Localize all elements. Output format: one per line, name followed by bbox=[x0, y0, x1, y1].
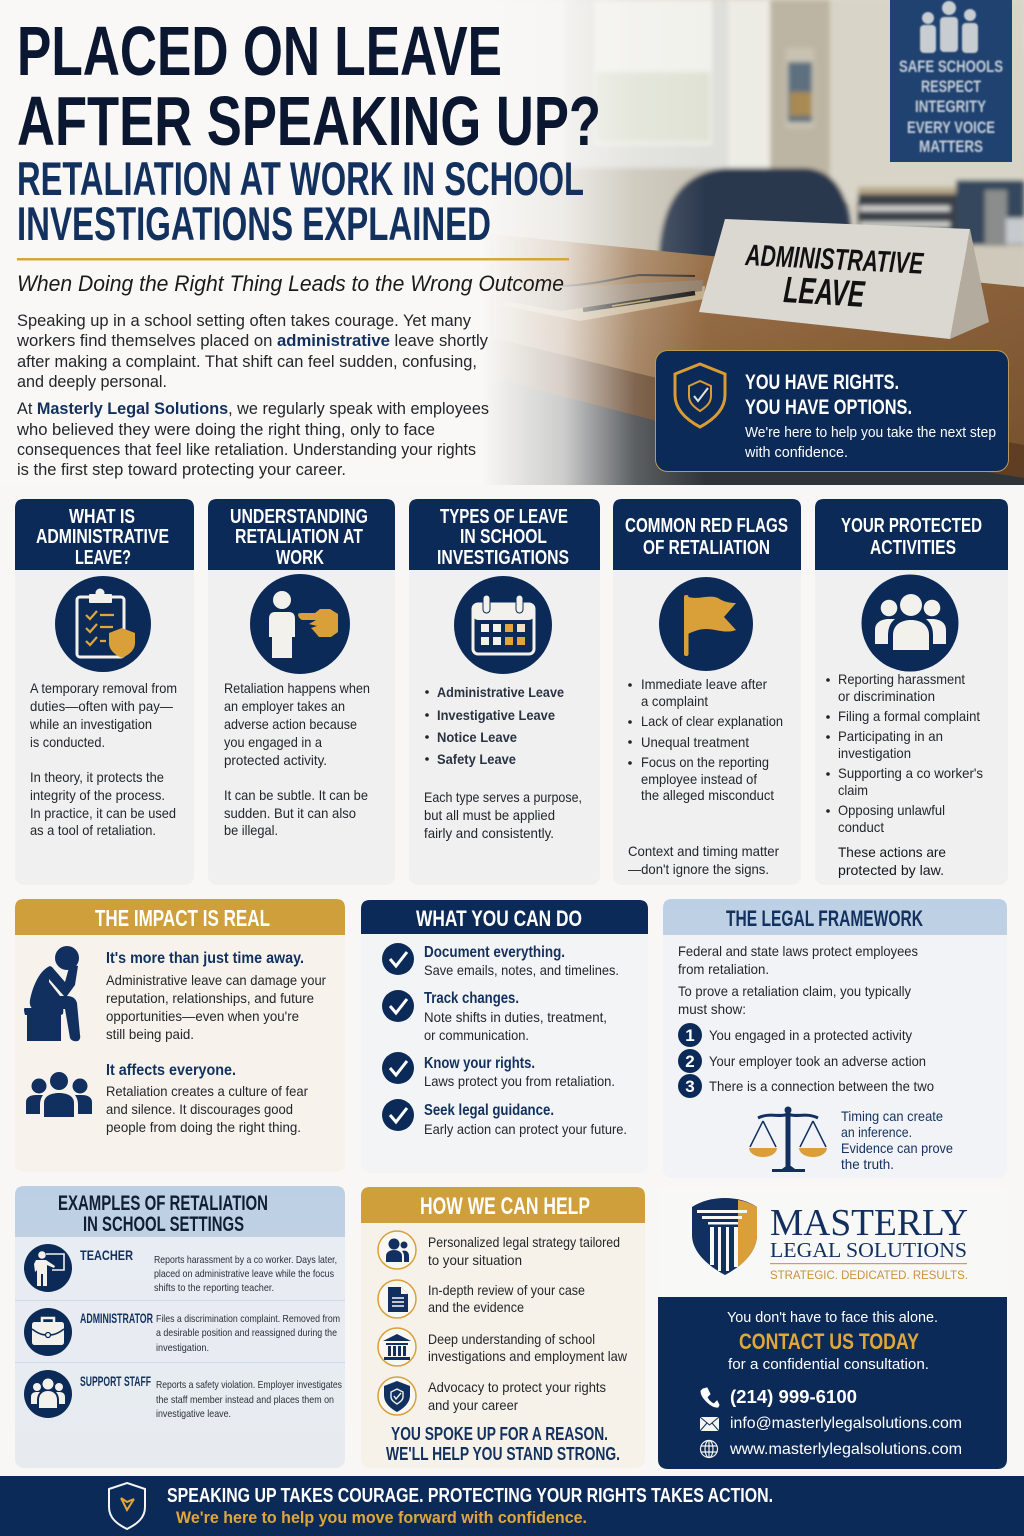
text: from retaliation. bbox=[678, 961, 769, 977]
icon: calendar bbox=[454, 576, 552, 674]
intro text: and deeply personal. bbox=[17, 372, 167, 391]
poster: safe schools: EVERY VOICE bbox=[907, 118, 995, 137]
numbered list: 3 bbox=[685, 1077, 695, 1096]
subtitle bbox=[17, 152, 584, 250]
item: document everything: Document everything. bbox=[424, 944, 565, 961]
item: school and employment law bbox=[378, 1328, 628, 1366]
hero photo: desk with administrative leave sign bbox=[470, 0, 1024, 485]
item: advocacy bbox=[378, 1377, 606, 1415]
text: people from doing the right thing. bbox=[106, 1119, 301, 1135]
text: It affects everyone. bbox=[106, 1062, 236, 1079]
heading: INVESTIGATIONS bbox=[437, 547, 569, 569]
heading: YOUR PROTECTED bbox=[841, 515, 982, 537]
example: support staff: SUPPORT STAFF bbox=[80, 1373, 151, 1389]
text: Each type serves a purpose, bbox=[424, 789, 582, 805]
intro text: is the first step toward protecting your career. bbox=[17, 460, 346, 479]
panel: contact us bbox=[658, 1297, 1007, 1469]
item: track changes: or communication. bbox=[424, 1027, 529, 1043]
heading bbox=[58, 1192, 268, 1236]
example: teacher: placed on administrative leave while the focus bbox=[154, 1268, 334, 1280]
item: track changes: Track changes. bbox=[424, 990, 519, 1007]
list: claim bbox=[838, 782, 868, 798]
panel: contact us: CONTACT US TODAY bbox=[739, 1329, 919, 1354]
item: track changes: Note shifts in duties, treatment, bbox=[424, 1009, 607, 1025]
logo: masterly legal solutions: MASTERLY bbox=[770, 1202, 968, 1244]
example: administrator: Files a discrimination complaint. Removed from bbox=[156, 1313, 340, 1325]
title bbox=[17, 12, 601, 160]
text bbox=[424, 789, 582, 841]
panel: the legal framework bbox=[663, 899, 1007, 1178]
text: Retaliation creates a culture of fear bbox=[106, 1083, 308, 1099]
heading: HOW WE CAN HELP bbox=[420, 1193, 590, 1220]
list: Administrative Leave bbox=[437, 684, 564, 700]
footer banner bbox=[0, 1476, 1024, 1536]
item: seek legal guidance bbox=[382, 1099, 627, 1137]
footer banner: SPEAKING UP TAKES COURAGE. PROTECTING YOUR RIGHTS TAKES ACTION. bbox=[167, 1485, 773, 1507]
callout: you have rights: YOU HAVE RIGHTS. bbox=[745, 371, 899, 394]
list bbox=[628, 676, 783, 803]
text: but all must be applied bbox=[424, 807, 555, 823]
heading: COMMON RED FLAGS bbox=[625, 515, 788, 537]
text bbox=[106, 950, 326, 1042]
panel: how we can help bbox=[361, 1187, 645, 1468]
panel: contact us: info@masterlylegalsolutions.com bbox=[730, 1415, 962, 1432]
panel: types of leave bbox=[409, 499, 600, 885]
title: PLACED ON LEAVE bbox=[17, 12, 502, 90]
text: These actions are bbox=[838, 844, 946, 860]
item: school and employment law: Deep understanding of school bbox=[428, 1331, 595, 1347]
footer banner: We're here to help you move forward with confidence. bbox=[176, 1508, 587, 1527]
closing statement bbox=[386, 1424, 620, 1464]
icon: envelope bbox=[700, 1417, 719, 1431]
text: Administrative leave can damage your bbox=[106, 972, 326, 988]
text: is conducted. bbox=[30, 734, 105, 750]
example: administrator bbox=[24, 1308, 340, 1356]
text: sudden. But it can also bbox=[224, 805, 356, 821]
icon: person and pointing hand bbox=[250, 574, 350, 674]
heading: LEAVE? bbox=[75, 547, 131, 569]
list: Safety Leave bbox=[437, 751, 516, 767]
heading bbox=[437, 506, 569, 569]
hero fade overlay bbox=[0, 0, 1024, 485]
subtitle: INVESTIGATIONS EXPLAINED bbox=[17, 197, 491, 250]
icon: footer shield bbox=[109, 1483, 145, 1529]
item: track changes bbox=[382, 990, 607, 1043]
heading: IN SCHOOL SETTINGS bbox=[83, 1213, 244, 1236]
text: be illegal. bbox=[224, 822, 278, 838]
text bbox=[106, 1062, 308, 1135]
list: a complaint bbox=[641, 693, 708, 709]
text: A temporary removal from bbox=[30, 680, 177, 696]
text bbox=[678, 943, 918, 1017]
list: Investigative Leave bbox=[437, 707, 555, 723]
heading: THE LEGAL FRAMEWORK bbox=[726, 906, 923, 931]
numbered list: You engaged in a protected activity bbox=[709, 1027, 912, 1043]
icon: distressed person bbox=[24, 946, 80, 1041]
heading: WHAT IS bbox=[69, 506, 135, 528]
text: reputation, relationships, and future bbox=[106, 990, 314, 1006]
example: support staff: the staff member instead and places them on bbox=[156, 1394, 334, 1406]
heading: ADMINISTRATIVE bbox=[36, 526, 169, 548]
text: Timing can create bbox=[841, 1108, 943, 1124]
example: support staff: Reports a safety violation. Employer investigates bbox=[156, 1379, 342, 1391]
heading: UNDERSTANDING bbox=[230, 506, 368, 528]
icon: scales of justice bbox=[749, 1106, 827, 1172]
subtitle: RETALIATION AT WORK IN SCHOOL bbox=[17, 152, 584, 205]
list: Participating in an bbox=[838, 728, 943, 744]
callout: you have rights bbox=[656, 350, 1008, 472]
text: opportunities—even when you're bbox=[106, 1008, 299, 1024]
list: Reporting harassment bbox=[838, 671, 965, 687]
list: Unequal treatment bbox=[641, 734, 749, 750]
text: the truth. bbox=[841, 1156, 894, 1172]
text: Context and timing matter bbox=[628, 843, 779, 859]
list: Supporting a co worker's bbox=[838, 765, 983, 781]
intro text: At Masterly Legal Solutions, we regularly speak with employees bbox=[17, 399, 489, 418]
closing statement: WE'LL HELP YOU STAND STRONG. bbox=[386, 1444, 620, 1464]
item: school and employment law: investigations and employment law bbox=[428, 1348, 628, 1364]
list: investigation bbox=[838, 745, 911, 761]
tagline: When Doing the Right Thing Leads to the Wrong Outcome bbox=[17, 271, 564, 296]
list: conduct bbox=[838, 819, 884, 835]
panel: contact us: for a confidential consultation. bbox=[728, 1356, 929, 1373]
text: fairly and consistently. bbox=[424, 825, 554, 841]
numbered list: 2 bbox=[685, 1052, 695, 1071]
list: or discrimination bbox=[838, 688, 935, 704]
intro text: consequences that feel like retaliation. Understanding your rights bbox=[17, 440, 476, 459]
poster: safe schools bbox=[890, 0, 1012, 162]
intro text: who believed they were doing the right thing, only to face bbox=[16, 420, 435, 439]
panel: understanding retaliation bbox=[208, 499, 395, 885]
example: teacher: Reports harassment by a co worker. Days later, bbox=[154, 1254, 337, 1266]
text bbox=[841, 1108, 953, 1172]
intro text bbox=[16, 311, 489, 479]
callout: you have rights: We're here to help you take the next step bbox=[745, 424, 996, 441]
list bbox=[425, 684, 564, 767]
numbered list: 1 bbox=[685, 1026, 695, 1045]
item: know your rights: Know your rights. bbox=[424, 1055, 535, 1072]
item: know your rights bbox=[382, 1052, 615, 1089]
logo: masterly legal solutions: STRATEGIC. DEDICATED. RESULTS. bbox=[770, 1268, 968, 1282]
panel: protected activities bbox=[815, 499, 1008, 885]
icon: flag bbox=[659, 577, 753, 671]
text: as a tool of retaliation. bbox=[30, 822, 156, 838]
list: the alleged misconduct bbox=[641, 787, 774, 803]
heading: WORK bbox=[276, 547, 324, 569]
text: and silence. It discourages good bbox=[106, 1101, 293, 1117]
heading: IN SCHOOL bbox=[460, 526, 547, 548]
text: Evidence can prove bbox=[841, 1140, 953, 1156]
intro text: after making a complaint. That shift can feel sudden, confusing, bbox=[17, 352, 477, 371]
poster: safe schools: RESPECT bbox=[921, 77, 981, 96]
logo: masterly legal solutions: LEGAL SOLUTIONS bbox=[770, 1238, 967, 1262]
list: Filing a formal complaint bbox=[838, 708, 980, 724]
text bbox=[224, 680, 370, 838]
panel: contact us: www.masterlylegalsolutions.com bbox=[729, 1441, 962, 1458]
heading: TYPES OF LEAVE bbox=[440, 506, 568, 528]
list: Focus on the reporting bbox=[641, 754, 769, 770]
text: adverse action because bbox=[224, 716, 357, 732]
icon: people bbox=[862, 574, 958, 672]
panel: what you can do bbox=[361, 900, 648, 1173]
text: protected activity. bbox=[224, 752, 327, 768]
icon: column shield bbox=[692, 1198, 757, 1275]
item: case review: In-depth review of your case bbox=[428, 1282, 585, 1298]
example: administrator: ADMINISTRATOR bbox=[80, 1310, 153, 1326]
text: you engaged in a bbox=[224, 734, 322, 750]
panel: what is administrative leave bbox=[15, 499, 194, 885]
example: support staff bbox=[24, 1370, 342, 1420]
text bbox=[628, 843, 779, 877]
item: case review: and the evidence bbox=[428, 1299, 524, 1315]
intro text: Speaking up in a school setting often takes courage. Yet many bbox=[17, 311, 471, 330]
heading: OF RETALIATION bbox=[643, 537, 770, 559]
heading: EXAMPLES OF RETALIATION bbox=[58, 1192, 268, 1215]
list bbox=[826, 671, 983, 835]
item: know your rights: Laws protect you from retaliation. bbox=[424, 1073, 615, 1089]
list: Lack of clear explanation bbox=[641, 713, 783, 729]
example: teacher: TEACHER bbox=[80, 1247, 133, 1263]
poster: safe schools: INTEGRITY bbox=[915, 97, 987, 116]
text: still being paid. bbox=[106, 1026, 194, 1042]
heading bbox=[230, 506, 368, 569]
text: must show: bbox=[678, 1001, 746, 1017]
text: integrity of the process. bbox=[30, 787, 165, 803]
item: seek legal guidance: Seek legal guidance. bbox=[424, 1102, 554, 1119]
callout: you have rights: YOU HAVE OPTIONS. bbox=[745, 396, 912, 419]
text bbox=[29, 680, 177, 838]
poster: safe schools: MATTERS bbox=[919, 137, 983, 156]
sign: administrative leave: ADMINISTRATIVE bbox=[744, 239, 925, 281]
example: administrator: investigation. bbox=[156, 1342, 209, 1354]
list: Opposing unlawful bbox=[838, 802, 945, 818]
example: teacher bbox=[24, 1244, 337, 1294]
example: administrator: a desirable position and reassigned during the bbox=[156, 1327, 337, 1339]
panel: contact us: (214) 999-6100 bbox=[730, 1387, 857, 1407]
item: legal strategy bbox=[378, 1231, 620, 1269]
item: advocacy: and your career bbox=[428, 1397, 518, 1413]
text: In practice, it can be used bbox=[30, 805, 176, 821]
text: In theory, it protects the bbox=[30, 769, 164, 785]
text: —don't ignore the signs. bbox=[628, 861, 769, 877]
text: It's more than just time away. bbox=[106, 950, 304, 967]
icon: phone bbox=[701, 1388, 719, 1407]
panel: the impact is real bbox=[15, 899, 345, 1172]
icon: shield check bbox=[675, 364, 725, 427]
item: legal strategy: Personalized legal strategy tailored bbox=[428, 1234, 620, 1250]
item: advocacy: Advocacy to protect your rights bbox=[428, 1379, 606, 1395]
text: Retaliation happens when bbox=[224, 680, 370, 696]
list: Immediate leave after bbox=[641, 676, 767, 692]
text bbox=[838, 844, 946, 878]
list: Notice Leave bbox=[437, 729, 517, 745]
item: legal strategy: to your situation bbox=[428, 1252, 522, 1268]
title: AFTER SPEAKING UP? bbox=[17, 82, 601, 160]
numbered list: Your employer took an adverse action bbox=[709, 1053, 926, 1069]
numbered list: There is a connection between the two bbox=[709, 1078, 934, 1094]
heading: ACTIVITIES bbox=[870, 537, 956, 559]
icon: group bbox=[26, 1072, 92, 1117]
example: teacher: shifts to the reporting teacher. bbox=[154, 1282, 274, 1294]
text: duties—often with pay— bbox=[30, 698, 173, 714]
text: protected by law. bbox=[838, 862, 944, 878]
sign: administrative leave: LEAVE bbox=[782, 269, 867, 315]
list: employee instead of bbox=[641, 771, 757, 787]
item: document everything bbox=[382, 943, 619, 978]
item: case review bbox=[378, 1280, 585, 1318]
heading bbox=[625, 515, 788, 559]
text: To prove a retaliation claim, you typically bbox=[678, 983, 911, 999]
sign: administrative leave bbox=[699, 219, 989, 339]
logo: masterly legal solutions bbox=[658, 1187, 1007, 1299]
panel: contact us: You don't have to face this alone. bbox=[727, 1309, 938, 1326]
example: support staff: investigative leave. bbox=[156, 1408, 231, 1420]
heading bbox=[841, 515, 982, 559]
text: an employer takes an bbox=[224, 698, 345, 714]
icon: globe bbox=[700, 1440, 718, 1458]
panel: red flags bbox=[613, 499, 801, 885]
text: while an investigation bbox=[29, 716, 152, 732]
callout: you have rights: with confidence. bbox=[744, 444, 848, 461]
item: seek legal guidance: Early action can protect your future. bbox=[424, 1121, 627, 1137]
numbered list bbox=[678, 1023, 934, 1098]
heading: WHAT YOU CAN DO bbox=[416, 906, 582, 931]
text: an inference. bbox=[841, 1124, 912, 1140]
panel: examples of retaliation bbox=[15, 1186, 345, 1468]
closing statement: YOU SPOKE UP FOR A REASON. bbox=[391, 1424, 608, 1444]
heading: RETALIATION AT bbox=[235, 526, 363, 548]
text: Federal and state laws protect employees bbox=[678, 943, 918, 959]
item: document everything: Save emails, notes, and timelines. bbox=[424, 962, 619, 978]
text: It can be subtle. It can be bbox=[224, 787, 368, 803]
intro text: workers find themselves placed on administrative leave shortly bbox=[16, 331, 488, 350]
icon: clipboard and shield bbox=[55, 576, 151, 672]
heading bbox=[36, 506, 169, 569]
heading: THE IMPACT IS REAL bbox=[95, 905, 270, 931]
